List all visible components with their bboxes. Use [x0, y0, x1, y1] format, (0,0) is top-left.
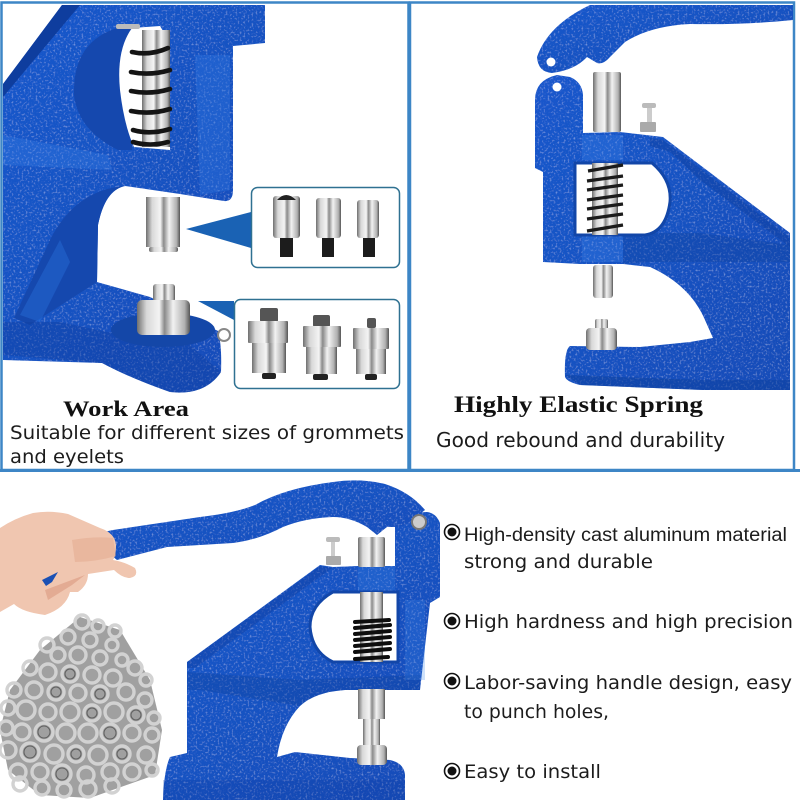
heading: highly elastic spring: Highly Elastic Spring: [454, 392, 704, 417]
callout box: upper punches: [186, 188, 400, 268]
spring window: [310, 592, 398, 662]
press body: [163, 512, 440, 800]
callout box: lower dies: [198, 300, 400, 388]
feature: labor-saving handle: Labor-saving handle design, easy: [464, 672, 792, 694]
text: work area description: Suitable for different sizes of grommets: [10, 422, 404, 444]
pivot nut: [412, 515, 426, 529]
heading: work area: Work Area: [63, 396, 189, 421]
divider line: [0, 469, 800, 472]
spring window: [116, 24, 170, 150]
feature: labor-saving handle: to punch holes,: [464, 701, 609, 723]
feature: cast aluminum material: strong and durable: [464, 552, 653, 573]
handle pivot hole: [546, 58, 556, 66]
feature: easy to install: Easy to install: [464, 761, 601, 783]
panel: full press: [0, 469, 800, 800]
lower punch: [357, 689, 387, 765]
panel border: work area: [2, 2, 408, 470]
panel: work area: [2, 2, 410, 470]
upper punch: [146, 197, 180, 252]
side pin: [218, 329, 230, 341]
hand: [0, 512, 136, 615]
adjustment bolt: [326, 537, 341, 565]
feature: cast aluminum material: [444, 524, 787, 573]
text: spring description: Good rebound and durability: [436, 428, 725, 452]
text: work area description: and eyelets: [10, 446, 124, 468]
panel border: elastic spring: [410, 2, 794, 470]
upper shaft: [358, 537, 385, 567]
adjustment bolt: [640, 103, 656, 132]
lower die: [586, 319, 617, 350]
lower punch: [593, 265, 613, 298]
press close-up body: [3, 5, 265, 393]
pile of silver grommets: [0, 615, 162, 798]
panel: elastic spring: [410, 2, 794, 470]
feature: cast aluminum material: High-density cast aluminum material: [464, 525, 787, 546]
lower die: [137, 284, 190, 335]
press handle: [537, 5, 793, 73]
lug hole: [552, 82, 562, 92]
upper shaft: [593, 72, 621, 132]
press handle: [93, 480, 425, 560]
feature: labor-saving handle: [444, 672, 792, 723]
feature: hardness and precision: High hardness and high precision: [464, 611, 793, 633]
spring window: [575, 163, 670, 235]
press body: [535, 75, 790, 390]
